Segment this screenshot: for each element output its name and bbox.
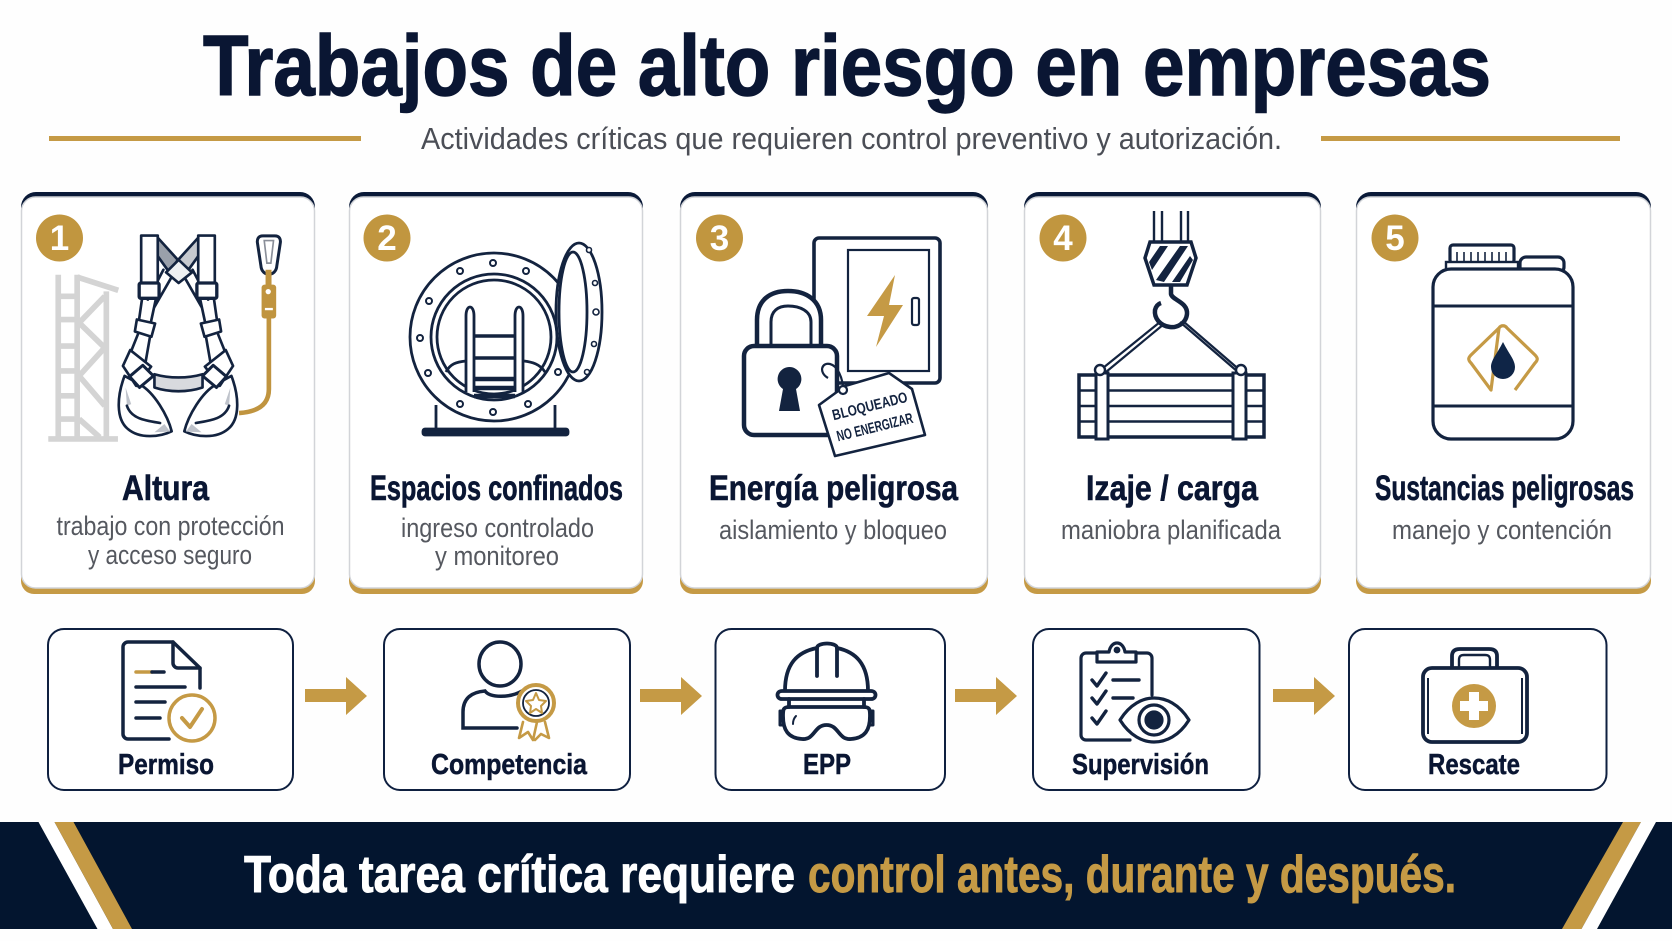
icon: first aid kit <box>1423 649 1527 742</box>
badge 2: 2 <box>377 219 397 258</box>
label: Rescate <box>1428 749 1520 781</box>
icon: padlock <box>744 291 837 435</box>
label: EPP <box>803 749 851 781</box>
icon: lockout tag: NO ENERGIZAR <box>835 410 915 445</box>
subtitle text: Actividades críticas que requieren control preventivo y autorización. <box>421 121 1282 156</box>
heading: Espacios confinados <box>370 469 623 508</box>
step: EPP <box>716 629 945 790</box>
panel: Espacios confinados <box>349 192 643 594</box>
description: ingreso controlado <box>401 513 594 543</box>
icon: electrical panel <box>814 238 940 383</box>
description <box>56 511 284 570</box>
badge 5 <box>1372 214 1418 262</box>
step: Supervisión <box>1033 629 1260 790</box>
description: maniobra planificada <box>1061 515 1281 545</box>
icon: lightning bolt <box>867 275 903 347</box>
badge 4 <box>1040 214 1086 262</box>
panel: Energía peligrosa <box>680 192 988 594</box>
icon: lockout tag <box>819 364 925 456</box>
icon: helmet and goggles <box>778 644 876 739</box>
description: trabajo con protección <box>56 511 284 541</box>
arrow <box>640 677 702 715</box>
harness: right half <box>177 236 237 436</box>
badge 4: 4 <box>1053 219 1073 258</box>
heading: Energía peligrosa <box>709 469 958 508</box>
heading: Altura <box>122 469 209 508</box>
description: aislamiento y bloqueo <box>719 515 947 545</box>
step: Rescate <box>1349 629 1606 790</box>
heading: Izaje / carga <box>1086 469 1258 508</box>
arrow <box>1273 677 1335 715</box>
icon: hazard diamond with drop <box>1469 326 1537 390</box>
label: Permiso <box>118 749 214 781</box>
harness: left half <box>119 236 179 436</box>
label: Competencia <box>431 749 588 781</box>
title: Trabajos de alto riesgo en empresas <box>203 19 1491 114</box>
description: manejo y contención <box>1392 515 1612 545</box>
icon: safety harness <box>119 236 237 436</box>
step: Competencia <box>384 629 630 790</box>
subtitle with rules <box>49 121 1620 156</box>
icon: certified person <box>463 642 554 740</box>
icon: manhole with ladder <box>410 243 602 435</box>
arrow <box>955 677 1017 715</box>
description <box>401 513 594 571</box>
icon: crane hook and load <box>1079 211 1264 439</box>
harness: chest diamond <box>166 260 192 283</box>
badge 1 <box>36 214 83 262</box>
label: Supervisión <box>1072 749 1209 781</box>
icon: scaffold <box>48 275 118 439</box>
icon: permit document <box>123 642 215 741</box>
step: Permiso <box>48 629 293 790</box>
panel: Sustancias peligrosas <box>1356 192 1651 594</box>
icon: clipboard and eye <box>1081 643 1189 742</box>
badge 5: 5 <box>1385 219 1405 258</box>
icon: lanyard and carabiner <box>239 236 280 413</box>
icon: lockout tag: BLOQUEADO <box>830 389 910 424</box>
arrow <box>305 677 367 715</box>
badge 3: 3 <box>710 219 729 258</box>
harness: belt <box>154 374 203 391</box>
panel: Izaje / carga <box>1024 192 1321 594</box>
icon: chemical canister <box>1433 245 1573 439</box>
panel: Altura <box>21 192 315 594</box>
icon: cross <box>1452 684 1496 728</box>
description: y monitoreo <box>435 541 559 571</box>
banner text: white: Toda tarea crítica requiere <box>244 846 795 904</box>
badge 2 <box>364 214 410 262</box>
badge 3 <box>696 214 743 262</box>
description: y acceso seguro <box>88 540 252 570</box>
badge 1: 1 <box>50 219 69 258</box>
banner text: gold: control antes, durante y después. <box>808 846 1456 904</box>
bottom banner <box>0 822 1672 929</box>
